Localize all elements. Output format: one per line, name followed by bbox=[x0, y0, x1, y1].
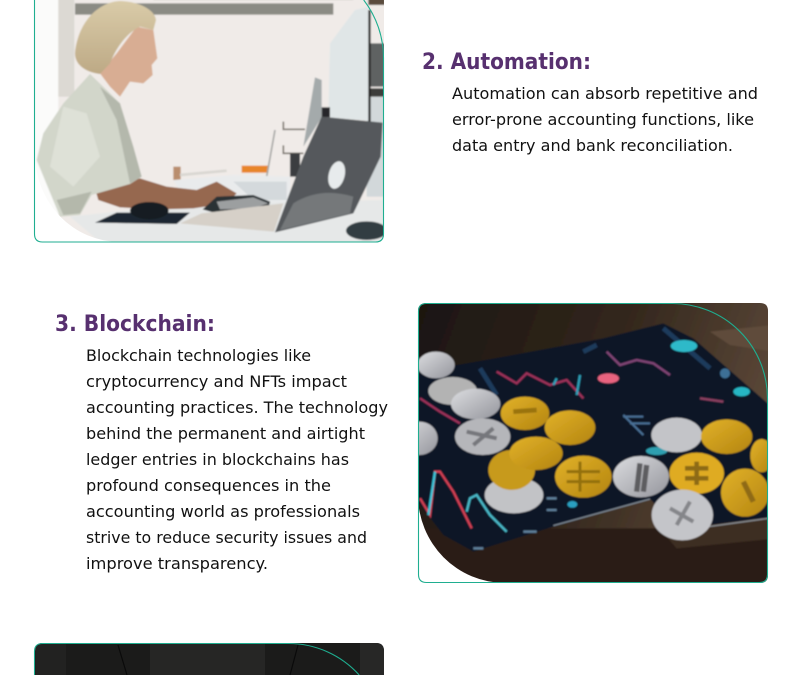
text block: blockchain description: accounting practices. The technology bbox=[86, 398, 388, 417]
photo: woman working at a laptop bbox=[20, 0, 387, 253]
text block: blockchain description: profound consequences in the bbox=[86, 476, 331, 495]
text block: blockchain description: improve transparency. bbox=[86, 554, 268, 573]
far desk items bbox=[242, 166, 268, 173]
photo: person in a dark jacket, cropped bbox=[34, 643, 385, 675]
text block: blockchain description: cryptocurrency and NFTs impact bbox=[86, 372, 347, 391]
coins bbox=[417, 352, 455, 378]
text block: automation description: data entry and bank reconciliation. bbox=[452, 136, 733, 155]
heading: 2. Automation: 2. Automation: bbox=[422, 50, 591, 75]
shirt bbox=[37, 74, 142, 217]
laptop base bbox=[180, 203, 283, 232]
hair bbox=[75, 1, 156, 74]
chart lines bbox=[420, 328, 723, 548]
mouse mat bbox=[95, 213, 190, 224]
keyboard bbox=[203, 195, 270, 213]
chart sheet bbox=[410, 323, 773, 552]
text block: automation description bbox=[452, 84, 758, 155]
laptop lid bbox=[275, 117, 383, 232]
text block: blockchain description: ledger entries in blockchains has bbox=[86, 450, 349, 469]
desk bbox=[72, 201, 383, 242]
neck and face bbox=[100, 27, 157, 97]
wall bbox=[58, 0, 384, 238]
wood table bbox=[418, 303, 768, 530]
chart highlights bbox=[671, 340, 697, 352]
laptop logo bbox=[327, 160, 346, 190]
text block: blockchain description: accounting world as professionals bbox=[86, 502, 360, 521]
text block: automation description: Automation can absorb repetitive and bbox=[452, 84, 758, 103]
text block: blockchain description: behind the permanent and airtight bbox=[86, 424, 365, 443]
monitors bbox=[328, 7, 368, 121]
photo outline bbox=[418, 304, 768, 582]
mouse bbox=[130, 202, 169, 219]
text block: blockchain description: strive to reduce security issues and bbox=[86, 528, 367, 547]
text block: blockchain description bbox=[86, 346, 388, 573]
photo outline bbox=[34, 0, 384, 242]
text block: blockchain description: Blockchain technologies like bbox=[86, 346, 311, 365]
far arm and hand bbox=[95, 178, 237, 209]
heading: 3. Blockchain: 3. Blockchain: bbox=[55, 312, 215, 337]
photo: crypto coins on a trading chart bbox=[418, 303, 768, 583]
right side bbox=[370, 43, 385, 87]
photo outline bbox=[34, 643, 359, 675]
text block: automation description: error-prone accounting functions, like bbox=[452, 110, 754, 129]
